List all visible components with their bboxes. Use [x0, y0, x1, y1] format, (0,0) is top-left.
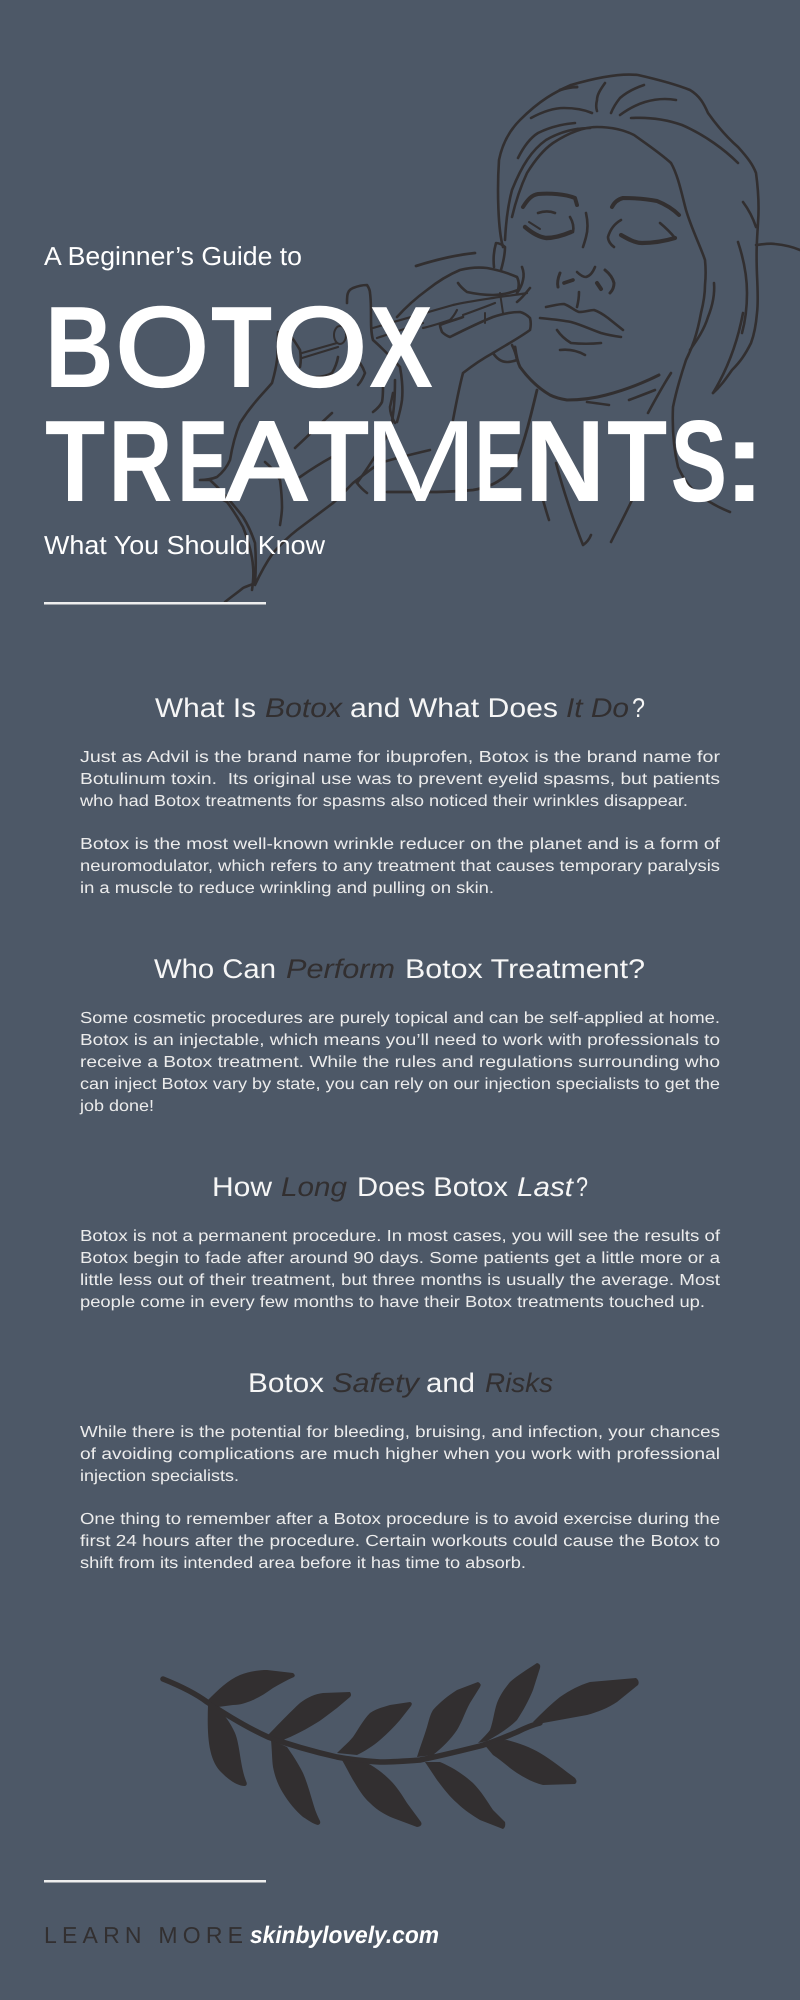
title: treatments: :	[723, 396, 766, 526]
heading: botox safety and risks: Botox	[248, 1368, 325, 1398]
text block: safety body: first 24 hours after the procedure. Certain workouts could cause the Botox to	[80, 1533, 720, 1550]
title: treatments: E	[475, 396, 524, 526]
text block: safety body: One thing to remember after a Botox procedure is to avoid exercise during the	[80, 1511, 720, 1528]
heading: how long does botox last: ?	[576, 1172, 588, 1202]
heading: how long does botox last: How	[212, 1172, 273, 1202]
lips	[546, 304, 623, 330]
text block: who can perform body: receive a Botox treatment. While the rules and regulations surrounding who	[80, 1054, 720, 1071]
heading: how long does botox last: Does Botox	[357, 1172, 509, 1202]
heading: who can perform botox treatment: Botox Treatment?	[405, 954, 645, 984]
footer: learn more: LEARN MORE	[44, 1922, 243, 1948]
lower hand	[440, 312, 531, 420]
text block: how long body: Botox begin to fade after around 90 days. Some patients get a little more or a	[80, 1250, 720, 1267]
text block: how long body	[80, 1228, 721, 1311]
text block: what is botox body: Botulinum toxin. Its original use was to prevent eyelid spasms, but patients	[80, 771, 720, 788]
heading: what is botox and what does it do: and What Does	[350, 693, 558, 723]
divider: footer rule	[44, 1880, 266, 1882]
heading: who can perform botox treatment: Who Can	[154, 954, 276, 984]
jaw and neck	[515, 347, 659, 400]
text block: who can perform body: can inject Botox vary by state, you can rely on our injection specialists to get the	[80, 1076, 720, 1093]
heading: who can perform botox treatment	[154, 954, 645, 984]
title: botox: O	[116, 284, 209, 410]
upper hand	[416, 253, 475, 266]
collar line	[387, 390, 537, 492]
section: safety and risks	[80, 1368, 720, 1572]
text block: who can perform body	[79, 1010, 720, 1115]
heading: how long does botox last: Last	[517, 1172, 575, 1202]
title: treatments	[45, 396, 766, 526]
heading: botox safety and risks: Risks	[485, 1368, 553, 1398]
eyes	[538, 212, 555, 213]
title: treatments: M	[363, 396, 478, 526]
title: botox: O	[273, 284, 367, 410]
heading: botox safety and risks: Safety	[332, 1368, 421, 1398]
title: treatments: R	[108, 396, 172, 526]
illustration: woman receiving injection	[200, 75, 800, 602]
divider: header rule	[44, 602, 266, 604]
brows	[523, 194, 577, 207]
text block: safety body: While there is the potential for bleeding, bruising, and infection, your chances	[80, 1424, 720, 1441]
text block: what is botox body: who had Botox treatments for spasms also noticed their wrinkles disappear.	[79, 793, 688, 810]
title: treatments: A	[227, 398, 307, 524]
thumb and palm	[347, 285, 402, 422]
title: botox: T	[211, 282, 272, 412]
heading: who can perform botox treatment: Perform	[286, 954, 395, 984]
heading: what is botox and what does it do: It Do	[566, 693, 629, 723]
section: how long does botox last	[80, 1172, 721, 1311]
title: treatments: N	[525, 396, 605, 526]
title: botox: X	[369, 282, 433, 412]
ear lobe	[493, 345, 517, 362]
text block: what is botox body: in a muscle to reduce wrinkling and pulling on skin.	[80, 880, 494, 897]
icon: leaf branch	[163, 1663, 639, 1829]
text block: how long body: little less out of their treatment, but three months is usually the average. Most	[80, 1272, 721, 1289]
text block: safety body: of avoiding complications are much higher when you work with professional	[80, 1446, 720, 1463]
syringe	[373, 293, 527, 328]
text block: who can perform body: Botox is an injectable, which means you’ll need to work with professionals to	[80, 1032, 720, 1049]
text block: what is botox body: Just as Advil is the brand name for ibuprofen, Botox is the brand name for	[80, 749, 721, 766]
nose	[583, 213, 588, 247]
text block: who can perform body: Some cosmetic procedures are purely topical and can be self-applied at home.	[80, 1010, 720, 1027]
heading: botox safety and risks	[248, 1368, 553, 1398]
text block: safety body	[80, 1424, 720, 1572]
heading: what is botox and what does it do: What Is	[155, 693, 256, 723]
section: what is botox	[79, 693, 721, 897]
heading: what is botox and what does it do	[155, 693, 645, 723]
text block: safety body: injection specialists.	[80, 1468, 239, 1485]
subtitle: what you should know: What You Should Know	[44, 530, 325, 560]
text block: how long body: Botox is not a permanent procedure. In most cases, you will see the results of	[80, 1228, 721, 1245]
title: treatments: S	[671, 396, 727, 526]
title: treatments: E	[177, 396, 228, 526]
title: botox: B	[45, 282, 114, 412]
section: who can perform	[79, 954, 720, 1115]
text block: what is botox body	[79, 749, 721, 897]
text block: how long body: people come in every few months to have their Botox treatments touched up.	[80, 1294, 705, 1311]
text block: what is botox body: neuromodulator, which refers to any treatment that causes temporary paralysis	[80, 858, 720, 875]
heading: how long does botox last: Long	[281, 1172, 347, 1202]
title: botox	[45, 282, 433, 412]
title: treatments: T	[607, 396, 667, 526]
heading: what is botox and what does it do: ?	[632, 693, 645, 723]
title: treatments: T	[308, 396, 369, 526]
subtitle: a beginner's guide: A Beginner’s Guide to	[44, 241, 302, 271]
text block: who can perform body: job done!	[79, 1098, 154, 1115]
text block: safety body: shift from its intended area before it has time to absorb.	[80, 1555, 526, 1572]
heading: botox safety and risks: and	[426, 1368, 475, 1398]
footer: website: skinbylovely.com	[250, 1922, 439, 1949]
heading: what is botox and what does it do: Botox	[265, 693, 344, 723]
title: treatments: T	[45, 396, 105, 526]
heading: how long does botox last	[212, 1172, 588, 1202]
text block: what is botox body: Botox is the most well-known wrinkle reducer on the planet and is a form of	[80, 836, 721, 853]
